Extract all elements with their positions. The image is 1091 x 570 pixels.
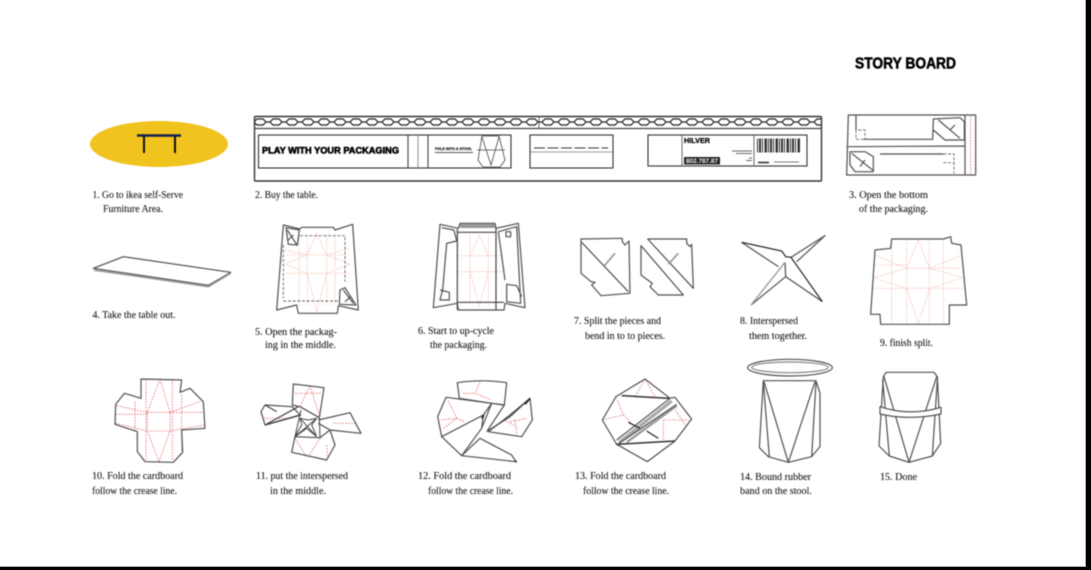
barcode	[757, 138, 801, 152]
caption 14: band on the stool.	[740, 486, 812, 497]
label: play with your packaging	[258, 135, 511, 168]
package outline	[254, 116, 822, 181]
step 7: split pieces	[574, 238, 693, 342]
step 3: open the bottom	[847, 115, 976, 215]
caption 11: 11. put the interspersed	[256, 471, 348, 482]
step 14: rubber band over the stool	[740, 359, 832, 497]
caption 6	[418, 326, 495, 351]
caption 6: 6. Start to up-cycle	[418, 326, 495, 337]
step 12: fold cardboard	[418, 381, 532, 497]
caption 3: 3. Open the bottom	[849, 190, 928, 201]
step 8: interspersed	[740, 236, 825, 342]
caption 6: the packaging.	[430, 340, 487, 351]
caption 11	[256, 471, 348, 497]
caption 10: follow the crease line.	[92, 486, 177, 497]
icon: yellow ellipse with table	[90, 121, 228, 167]
caption 2: 2. Buy the table.	[255, 190, 318, 201]
step 15: done	[879, 372, 941, 483]
product label: hilver	[648, 135, 807, 166]
icon: table top	[93, 257, 231, 287]
label: play with your packaging: FOLD INTO A STOOL	[435, 147, 473, 151]
caption 1: 1. Go to ikea self-Serve	[92, 190, 184, 201]
unfolded package	[277, 224, 358, 313]
caption 15: 15. Done	[880, 472, 918, 483]
caption 5: ing in the middle.	[265, 340, 336, 351]
caption 12: 12. Fold the cardboard	[418, 471, 511, 482]
caption 5	[255, 327, 337, 351]
step 4: table top	[92, 257, 231, 321]
partly folded form	[261, 384, 361, 460]
step 10: fold cardboard	[92, 379, 205, 497]
label: play with your packaging: PLAY WITH YOUR PACKAGING	[262, 146, 399, 156]
pinwheel	[742, 236, 825, 305]
two split pieces	[581, 238, 693, 296]
step 6: up-cycle	[418, 223, 525, 351]
icon: rubber band	[748, 359, 832, 376]
caption 10	[92, 471, 183, 497]
cross-shaped sheet	[115, 379, 205, 462]
caption 8: them together.	[749, 331, 807, 342]
caption 14: 14. Bound rubber	[740, 472, 812, 483]
icon: band on stool	[880, 407, 941, 417]
near-finished form	[602, 379, 692, 462]
caption 12: follow the crease line.	[428, 486, 513, 497]
product label: hilver: 802.787.87	[686, 158, 718, 165]
caption 9: 9. finish split.	[880, 338, 933, 349]
step 5: open the packaging	[255, 224, 358, 351]
trimmed sheet	[871, 237, 967, 324]
caption 8: 8. Interspersed	[740, 316, 798, 327]
title: STORY BOARD	[855, 56, 956, 72]
caption 10: 10. Fold the cardboard	[92, 471, 183, 482]
caption 3	[849, 190, 928, 215]
caption 1	[92, 190, 184, 215]
step 9: finish split	[871, 237, 967, 349]
unfolded package with panels	[433, 223, 525, 310]
caption 4: 4. Take the table out.	[92, 310, 176, 321]
caption 12	[418, 471, 513, 497]
caption 8	[740, 316, 807, 342]
finished stool	[879, 372, 941, 462]
product label: hilver: HILVER	[684, 138, 710, 145]
caption 14	[740, 472, 812, 497]
caption 5: 5. Open the packag-	[255, 327, 337, 338]
flattened package	[847, 115, 976, 175]
icon: stool	[759, 381, 820, 462]
caption 7	[574, 316, 665, 342]
middle label	[530, 135, 613, 168]
step 2: packaging box	[254, 116, 822, 201]
caption 13	[575, 471, 669, 497]
caption 13: follow the crease line.	[583, 486, 669, 497]
step 1: furniture area	[90, 121, 228, 215]
caption 3: of the packaging.	[859, 204, 928, 215]
caption 11: in the middle.	[270, 486, 326, 497]
step 13: fold cardboard	[575, 379, 692, 497]
caption 7: bend in to to pieces.	[585, 331, 665, 342]
caption 7: 7. Split the pieces and	[574, 316, 661, 327]
stool and band	[748, 359, 832, 462]
caption 1: Furniture Area.	[103, 204, 163, 215]
step 11: interspersed in the middle	[256, 384, 361, 497]
caption 13: 13. Fold the cardboard	[575, 471, 666, 482]
partly folded form	[438, 381, 532, 462]
icon: small stool	[477, 136, 505, 167]
